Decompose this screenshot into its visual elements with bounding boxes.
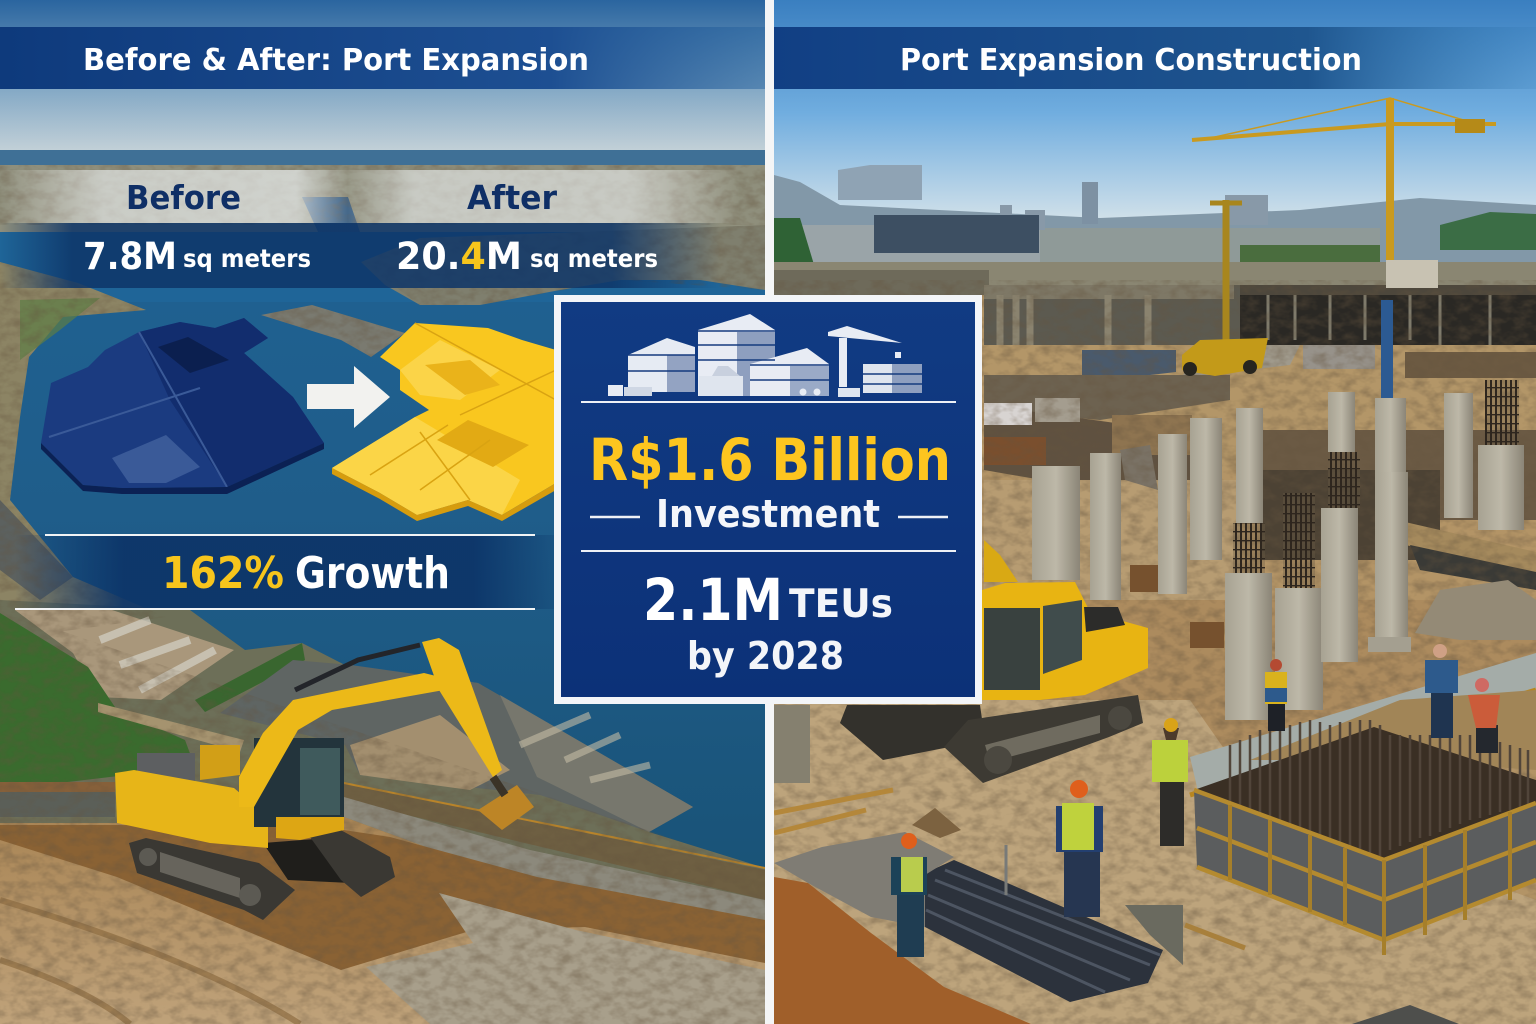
stat: after unit: sq meters xyxy=(530,244,658,273)
mid-ground structure xyxy=(984,285,1536,600)
haze band: before and after headings xyxy=(0,170,740,223)
stat: growth: 162% xyxy=(162,548,284,599)
banner: left title: Before & After: Port Expansion xyxy=(83,43,589,78)
concrete pillars xyxy=(1032,380,1524,720)
icon: blue mast xyxy=(1381,300,1393,398)
divider xyxy=(765,0,774,1024)
panel: investment callout xyxy=(554,295,982,704)
label: before: Before xyxy=(126,178,241,217)
stat: before unit: sq meters xyxy=(183,244,311,273)
banner: left title xyxy=(0,27,765,89)
stat: before area: 7.8M xyxy=(83,235,177,278)
excavator right xyxy=(840,540,1148,783)
rebar frame xyxy=(1190,653,1536,955)
panel: right construction scene xyxy=(774,0,1536,1024)
arrow: before to after xyxy=(307,366,390,428)
map: after footprint xyxy=(332,323,556,521)
stat: TEUs capacity: by 2028 xyxy=(687,634,844,678)
panel: left aerial scene xyxy=(0,0,765,1024)
stat: TEUs capacity: 2.1M xyxy=(643,566,783,634)
band: area statistics xyxy=(0,223,720,288)
heading: investment amount: R$1.6 Billion xyxy=(589,426,951,494)
stat: TEUs capacity: TEUs xyxy=(789,582,893,627)
stat: TEUs capacity xyxy=(643,566,893,678)
label: after: After xyxy=(467,178,558,217)
map: before footprint xyxy=(41,318,324,494)
pile of steel pipes xyxy=(925,845,1163,1002)
icon: piling rig xyxy=(1182,200,1268,376)
icon: port buildings and crane xyxy=(608,314,922,397)
excavator left xyxy=(115,638,534,920)
stat: growth: Growth xyxy=(295,548,450,599)
bottom ground details xyxy=(774,705,1459,1024)
stat: after area: 20.4M xyxy=(396,235,522,278)
heading: investment: Investment xyxy=(656,492,880,536)
workers xyxy=(891,644,1500,957)
icon: tower crane xyxy=(1192,98,1496,288)
banner: right title: Port Expansion Construction xyxy=(900,43,1362,78)
stat: growth xyxy=(15,535,555,609)
banner: right title xyxy=(774,27,1536,89)
